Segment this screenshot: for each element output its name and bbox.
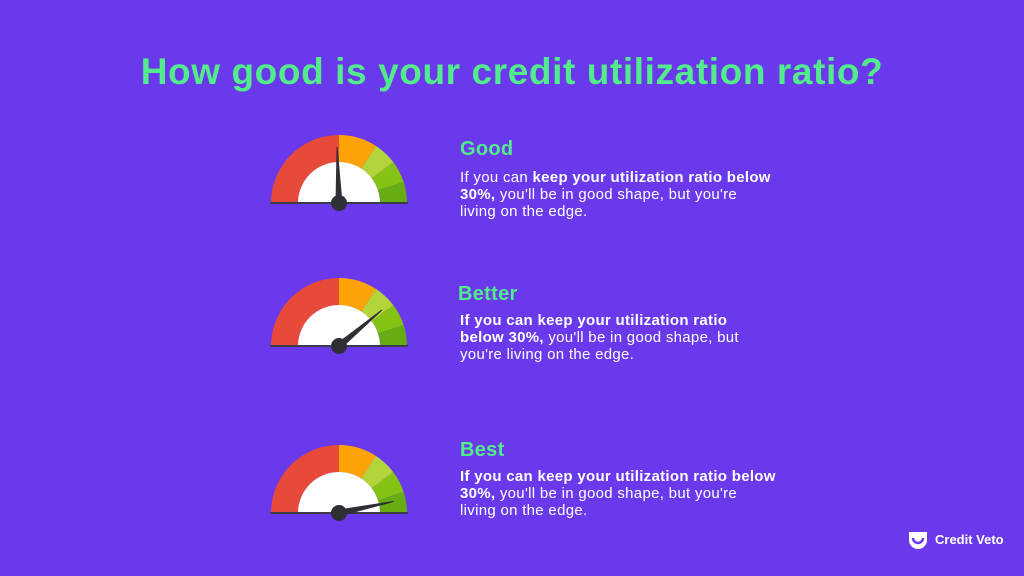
heading: best: Best bbox=[460, 439, 505, 461]
text: best bbox=[460, 468, 776, 519]
text: best: 30%, you'll be in good shape, but you're bbox=[460, 485, 737, 502]
text: good: 30%, you'll be in good shape, but you're bbox=[460, 186, 737, 203]
text: good: If you can keep your utilization ratio below bbox=[460, 169, 771, 186]
heading: good: Good bbox=[460, 138, 513, 160]
text: better bbox=[460, 312, 739, 363]
logo: Credit Veto bbox=[935, 532, 1004, 547]
heading: better: Better bbox=[458, 283, 518, 305]
text: good: living on the edge. bbox=[460, 203, 587, 220]
text: best: If you can keep your utilization ratio below bbox=[460, 468, 776, 485]
gauge: better bbox=[270, 278, 408, 354]
text: better: below 30%, you'll be in good shape, but bbox=[460, 329, 739, 346]
text: better: you're living on the edge. bbox=[460, 346, 634, 363]
logo bbox=[909, 532, 1004, 549]
title: How good is your credit utilization ratio? bbox=[141, 51, 883, 92]
gauge: good bbox=[270, 135, 408, 211]
text: good bbox=[460, 169, 771, 220]
text: better: If you can keep your utilization ratio bbox=[460, 312, 727, 329]
gauge: best bbox=[270, 445, 408, 521]
text: best: living on the edge. bbox=[460, 502, 587, 519]
